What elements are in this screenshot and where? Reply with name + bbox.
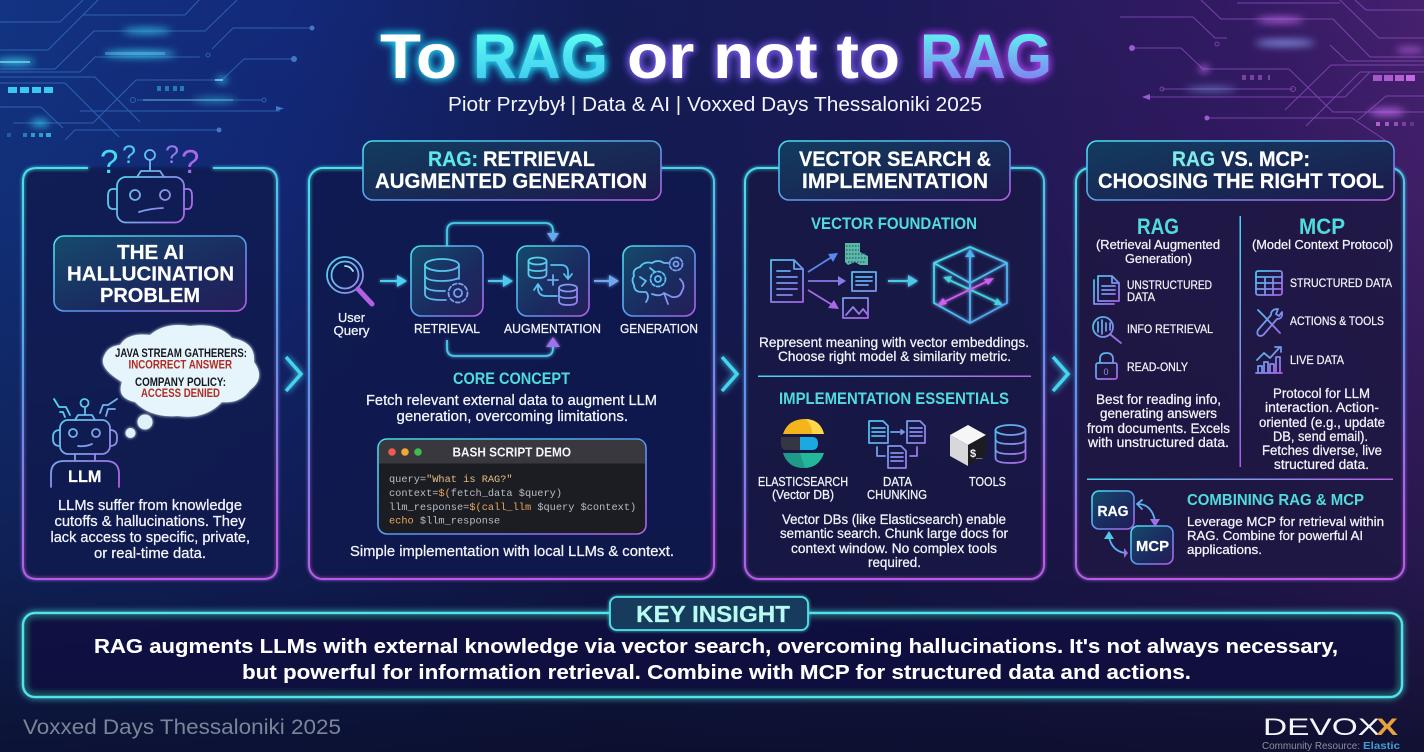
icon: question marks: ? <box>181 143 199 180</box>
column: MCP: (Model Context Protocol) <box>1252 238 1393 252</box>
arrow: chevron 3 <box>1053 357 1068 391</box>
arrow: bottom loop <box>447 337 560 356</box>
icon: info retrieval <box>1093 317 1121 343</box>
icon: document <box>771 260 803 302</box>
callout: thought cloud: JAVA STREAM GATHERERS: <box>115 348 247 360</box>
icon: live chart <box>1256 347 1282 373</box>
icon: retrieval database and gear <box>411 246 483 316</box>
text: MCP body: Protocol for LLM <box>1273 386 1370 401</box>
icon: question marks: ? <box>165 141 179 169</box>
heading: RAG vs MCP: RAG <box>1172 148 1215 171</box>
text: core concept body: generation, overcoming limitations. <box>396 409 628 425</box>
icon: noisy data block <box>845 243 868 265</box>
text: MCP body: Fetches diverse, live <box>1262 443 1382 458</box>
icon: image <box>843 298 868 318</box>
icon: LLM robot: LLM <box>68 467 102 486</box>
arrow: chevron 2 <box>722 357 737 391</box>
label: augmentation: AUGMENTATION <box>504 321 601 336</box>
heading: key insight: KEY INSIGHT <box>636 601 790 627</box>
column: RAG: Generation) <box>1125 252 1192 266</box>
text: vector DB body: required. <box>868 555 921 570</box>
heading: key insight <box>610 597 808 630</box>
icon: LLM robot <box>51 399 119 487</box>
icon: tools <box>950 425 1026 466</box>
icon: tools: $_ <box>970 448 983 460</box>
heading: core concept: CORE CONCEPT <box>453 370 570 388</box>
icon: magnifier <box>327 257 372 304</box>
heading: RAG: RETRIEVAL <box>483 148 595 171</box>
title: or not to <box>627 22 900 92</box>
heading: the AI hallucination problem: PROBLEM <box>100 284 200 307</box>
heading: RAG vs MCP: CHOOSING THE RIGHT TOOL <box>1098 170 1384 193</box>
text: MCP body: oriented (e.g., update <box>1259 415 1385 430</box>
arrow: top loop <box>447 223 559 246</box>
icon: question marks: ? <box>100 143 118 180</box>
heading: RAG vs MCP <box>1087 141 1394 200</box>
logo: Devoxx: Community Resource: <box>1262 740 1360 752</box>
icon: lock: 0 <box>1104 367 1109 377</box>
icon: lock <box>1096 353 1117 379</box>
icon: vector cube <box>934 247 1007 323</box>
heading: combining RAG and MCP: COMBINING RAG & MCP <box>1187 492 1364 509</box>
text: MCP body: structured data. <box>1274 457 1369 472</box>
icon: data chunking <box>869 421 925 468</box>
text: key insight body: RAG augments LLMs with external knowledge via vector search, overcoming hallucinations. It's not always necessary, <box>94 635 1338 658</box>
code terminal: bash script demo: llm_response=$(call_llm $query $context) <box>389 502 636 514</box>
flow diagram <box>327 223 698 356</box>
text: vector DB body: Vector DBs (like Elasticsearch) enable <box>782 512 1006 527</box>
label: data chunking <box>867 475 927 502</box>
callout: thought cloud: ACCESS DENIED <box>141 388 220 400</box>
icon: generation brain <box>623 246 695 316</box>
panel: RAG vs MCP <box>1076 141 1404 579</box>
code terminal: bash script demo: BASH SCRIPT DEMO <box>452 446 571 460</box>
callout: thought cloud: INCORRECT ANSWER <box>128 360 233 372</box>
label: tools: TOOLS <box>969 475 1006 489</box>
text: LLM limitations: LLMs suffer from knowledge <box>58 498 242 514</box>
panel: AI hallucination problem <box>23 141 277 579</box>
label: user query <box>334 310 370 338</box>
icon: question marks <box>100 141 199 180</box>
text: vector DB body <box>780 512 1008 570</box>
logo: Devoxx: Elastic <box>1363 740 1400 752</box>
icon: confused robot <box>108 150 192 222</box>
label: user query: User <box>338 310 366 325</box>
icon: RAG and MCP combined: MCP <box>1136 538 1169 555</box>
code terminal: bash script demo <box>378 439 646 534</box>
text: represent meaning <box>759 334 1029 364</box>
diagram: embeddings <box>771 243 1007 323</box>
icon: table <box>1256 271 1282 295</box>
title: RAG <box>473 22 608 92</box>
text: RAG body: from documents. Excels <box>1087 421 1230 436</box>
icon: augmentation <box>517 246 589 316</box>
icon: elasticsearch logo <box>781 419 824 468</box>
subtitle: Piotr Przybył | Data & AI | Voxxed Days Thessaloniki 2025 <box>448 93 982 116</box>
text: key insight body: but powerful for information retrieval. Combine with MCP for structured data and actions. <box>242 661 1191 684</box>
text: RAG body <box>1087 392 1230 450</box>
text: combining body <box>1187 514 1384 557</box>
heading: vector search: IMPLEMENTATION <box>802 170 988 193</box>
icon: RAG and MCP combined <box>1092 491 1173 564</box>
icon: question marks: ? <box>122 141 136 169</box>
code terminal: bash script demo: context=$(fetch_data $query) <box>389 488 562 500</box>
text: key insight body <box>94 635 1338 684</box>
callout: thought cloud: COMPANY POLICY: <box>135 377 226 389</box>
text: LLM limitations: lack access to specific, private, <box>50 530 250 546</box>
heading: RAG <box>363 141 661 200</box>
heading: RAG: RAG: <box>428 148 478 171</box>
label: data chunking: DATA <box>883 475 913 489</box>
label: user query: Query <box>334 323 370 338</box>
panel: key insight <box>23 597 1402 697</box>
text: combining body: applications. <box>1187 542 1262 557</box>
heading: vector foundation: VECTOR FOUNDATION <box>811 215 977 233</box>
heading: the AI hallucination problem: THE AI <box>117 241 184 264</box>
icon: text block <box>852 272 876 291</box>
label: elasticsearch: ELASTICSEARCH <box>758 475 848 489</box>
label: unstructured data: DATA <box>1127 290 1155 304</box>
text: combining body: Leverage MCP for retrieval within <box>1187 514 1384 529</box>
icon: RAG and MCP combined: RAG <box>1098 503 1128 520</box>
label: info retrieval: INFO RETRIEVAL <box>1127 322 1213 336</box>
text: combining body: RAG. Combine for powerful AI <box>1187 528 1363 543</box>
title: To <box>380 22 457 92</box>
label: elasticsearch: (Vector DB) <box>772 488 834 502</box>
text: LLM limitations: or real-time data. <box>94 546 206 562</box>
panel: RAG retrieval augmented generation <box>309 141 714 579</box>
text: core concept body: Fetch relevant external data to augment LLM <box>366 393 657 409</box>
logo: Devoxx <box>1262 714 1400 752</box>
label: live data: LIVE DATA <box>1290 353 1344 367</box>
text: MCP body: interaction. Action- <box>1265 400 1379 415</box>
footer: event name: Voxxed Days Thessaloniki 2025 <box>23 715 341 739</box>
heading: vector search: VECTOR SEARCH & <box>799 148 991 171</box>
label: unstructured data: UNSTRUCTURED <box>1127 278 1212 292</box>
logo: Devoxx: DEVOX <box>1263 714 1380 741</box>
text: LLM limitations: cutoffs & hallucinations. They <box>54 514 246 530</box>
label: data chunking: CHUNKING <box>867 488 927 502</box>
text: represent meaning: Choose right model & similarity metric. <box>778 348 1011 364</box>
logo: Devoxx: X <box>1376 714 1398 741</box>
text: LLM limitations <box>50 498 250 562</box>
label: elasticsearch <box>758 475 848 502</box>
text: represent meaning: Represent meaning with vector embeddings. <box>759 334 1029 350</box>
arrow: augmentation to generation <box>594 275 619 287</box>
arrow: chevron 1 <box>286 357 301 391</box>
heading: implementation essentials: IMPLEMENTATION ESSENTIALS <box>779 390 1009 408</box>
icon: wrench and screwdriver <box>1257 309 1282 336</box>
text: RAG body: with unstructured data. <box>1087 435 1229 450</box>
heading: RAG: AUGMENTED GENERATION <box>375 170 647 193</box>
icon: documents <box>1094 276 1119 304</box>
label: generation: GENERATION <box>620 321 698 336</box>
text: core concept body <box>366 393 657 425</box>
label: read-only: READ-ONLY <box>1127 360 1188 374</box>
column: RAG: (Retrieval Augmented <box>1096 238 1220 252</box>
title <box>380 22 1052 92</box>
arrows: document split <box>808 253 846 309</box>
text: MCP body <box>1259 386 1385 472</box>
code terminal: bash script demo: query="What is RAG?" <box>389 474 513 486</box>
heading: the AI hallucination problem <box>54 236 246 311</box>
arrow: retrieval to augmentation <box>488 275 513 287</box>
arrow: to vector space <box>888 275 918 287</box>
label: actions and tools: ACTIONS & TOOLS <box>1290 314 1384 328</box>
title: RAG <box>920 22 1052 92</box>
column: RAG <box>1087 214 1230 450</box>
label: structured data: STRUCTURED DATA <box>1290 276 1392 290</box>
heading: vector search <box>779 141 1010 200</box>
column: MCP: MCP <box>1299 214 1345 239</box>
panel: vector search and implementation <box>745 141 1044 579</box>
text: MCP body: DB, send email). <box>1273 429 1368 444</box>
label: retrieval: RETRIEVAL <box>414 321 480 336</box>
column: RAG: RAG <box>1137 214 1179 239</box>
code terminal: bash script demo: echo $llm_response <box>389 516 500 528</box>
text: simple implementation: Simple implementation with local LLMs & context. <box>350 544 674 560</box>
text: RAG body: Best for reading info, <box>1096 392 1221 407</box>
text: RAG body: generating answers <box>1100 406 1217 421</box>
text: vector DB body: semantic search. Chunk large docs for <box>780 526 1008 541</box>
heading: the AI hallucination problem: HALLUCINATION <box>67 262 234 286</box>
label: unstructured data <box>1127 278 1212 304</box>
heading: RAG vs MCP: VS. MCP: <box>1221 148 1310 171</box>
arrow: query to retrieval <box>380 275 407 287</box>
column: MCP <box>1252 214 1393 472</box>
text: vector DB body: context window. No complex tools <box>791 541 997 556</box>
callout: thought cloud <box>103 325 259 438</box>
